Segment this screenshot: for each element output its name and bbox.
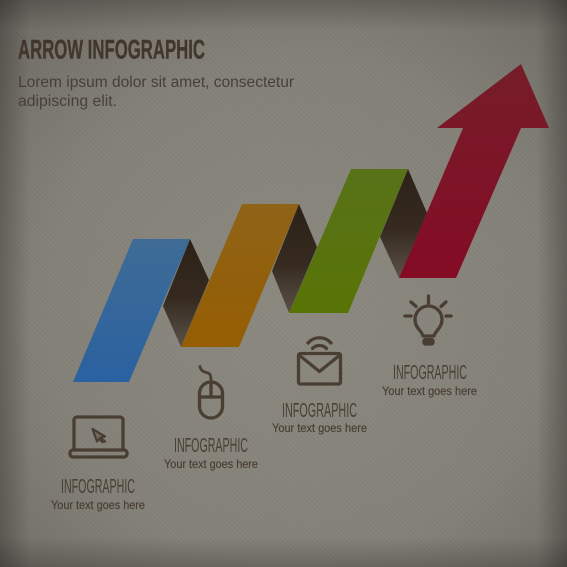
icon: laptop (70, 417, 127, 457)
subtitle text (18, 74, 295, 110)
segment: red arrow head (399, 64, 549, 278)
step 1: laptop (51, 417, 145, 512)
segment: orange (181, 204, 299, 347)
icon: light bulb (405, 296, 451, 344)
fold: blue to orange (163, 239, 209, 347)
step 2: mouse (164, 366, 258, 471)
fold: orange to green (272, 204, 317, 313)
caption: Your text goes here (51, 498, 145, 512)
step 3: mail (272, 338, 367, 435)
label: infographic: INFOGRAPHIC (393, 362, 467, 384)
fold: green to red (380, 169, 427, 278)
zigzag arrow chart (73, 64, 549, 382)
subtitle text: adipiscing elit. (18, 93, 117, 110)
title: ARROW INFOGRAPHIC (18, 34, 205, 64)
label: infographic: INFOGRAPHIC (282, 400, 357, 422)
caption: Your text goes here (272, 421, 367, 435)
step 4: idea (382, 296, 477, 398)
icon: mouse (200, 366, 222, 418)
label: infographic: INFOGRAPHIC (61, 476, 135, 498)
segment: green (289, 169, 408, 313)
label: infographic: INFOGRAPHIC (174, 435, 248, 457)
icon: envelope with signal (298, 338, 340, 384)
caption: Your text goes here (382, 384, 477, 398)
subtitle text: Lorem ipsum dolor sit amet, consectetur (18, 74, 295, 91)
caption: Your text goes here (164, 457, 258, 471)
segment: blue (73, 239, 190, 382)
